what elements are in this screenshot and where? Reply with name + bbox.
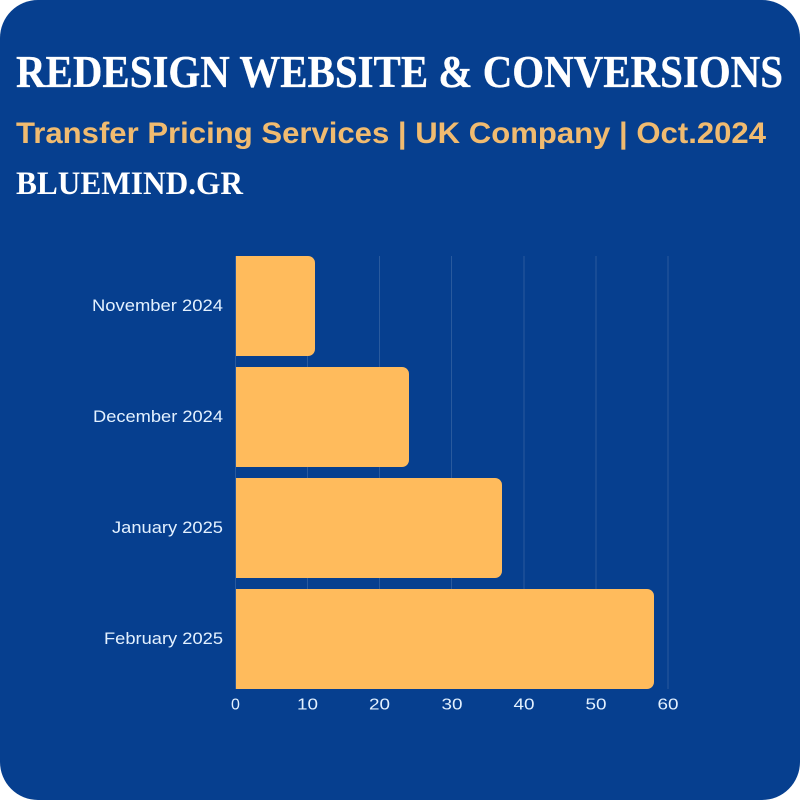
value axis labels: 0 [231,696,240,714]
value axis labels: 10 [297,696,318,714]
value axis labels: 50 [586,696,607,714]
value axis labels: 20 [369,696,390,714]
value axis labels: 60 [658,696,679,714]
category labels: February 2025 [104,629,223,648]
category labels: December 2024 [93,407,223,426]
subtitle: Transfer Pricing Services | UK Company | Oct.2024 [16,117,766,150]
bar: November 2024 [236,256,315,356]
value axis labels [231,696,679,714]
grid lines [236,256,668,689]
bar: December 2024 [236,367,409,467]
brand name: BLUEMIND.GR [16,166,244,202]
value axis labels: 40 [514,696,535,714]
bar chart [92,256,679,714]
bar: January 2025 [236,478,502,578]
value axis labels: 30 [442,696,463,714]
category labels: November 2024 [92,296,223,315]
bar: February 2025 [236,589,654,689]
category labels: January 2025 [112,518,223,537]
category labels [92,296,223,648]
